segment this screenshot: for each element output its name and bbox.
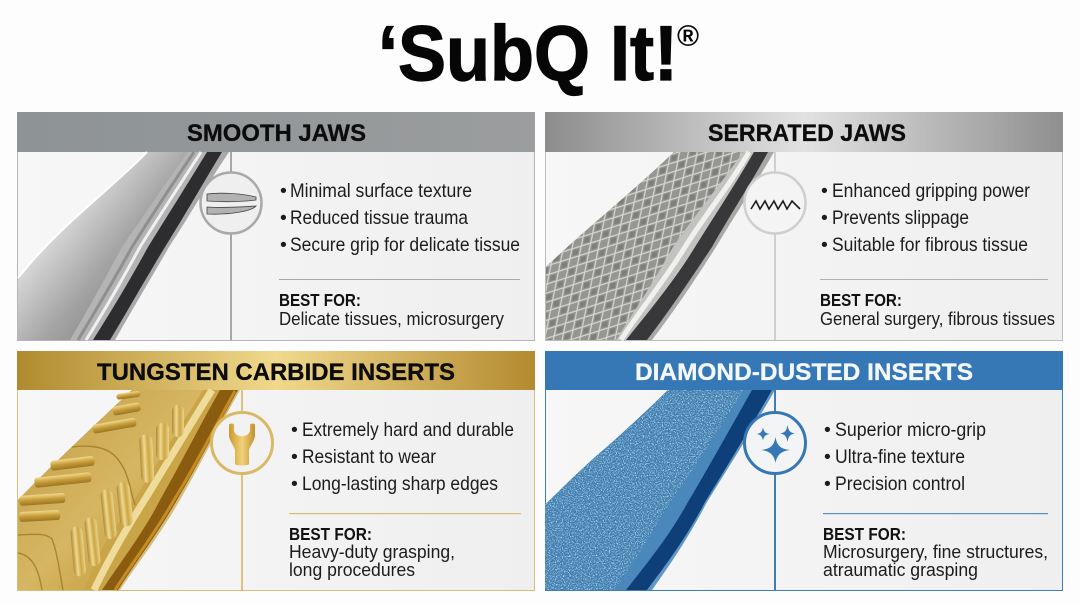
benefits list: Enhanced gripping power xyxy=(832,180,1030,202)
benefits list: • xyxy=(821,234,828,256)
icon: smooth jaws xyxy=(200,172,262,234)
image: blue tweezer jaw xyxy=(545,390,775,590)
best for xyxy=(820,290,1055,329)
divider xyxy=(774,152,776,340)
benefits list: Superior micro-grip xyxy=(835,419,986,441)
image: gold tweezer jaw xyxy=(18,390,240,590)
best for: General surgery, fibrous tissues xyxy=(820,308,1055,329)
benefits list: • xyxy=(280,180,287,202)
benefits list: • xyxy=(280,207,287,229)
benefits list xyxy=(824,419,986,495)
benefits list xyxy=(280,180,520,256)
icon: tungsten insert xyxy=(212,412,272,474)
header: tungsten carbide inserts: TUNGSTEN CARBIDE INSERTS xyxy=(97,359,455,386)
benefits list: • xyxy=(824,473,831,495)
icon: diamond sparkles xyxy=(744,412,806,474)
benefits list xyxy=(821,180,1030,256)
benefits list: Extremely hard and durable xyxy=(302,419,514,441)
header: tungsten carbide inserts xyxy=(17,351,535,390)
panel: serrated jaws xyxy=(545,112,1063,340)
benefits list: Precision control xyxy=(835,473,965,495)
benefits list: Suitable for fibrous tissue xyxy=(832,234,1028,256)
title: ‘SubQ It! xyxy=(378,9,678,97)
best for xyxy=(823,524,1048,580)
best for: BEST FOR: xyxy=(820,290,902,310)
best for: BEST FOR: xyxy=(823,524,906,544)
benefits list xyxy=(291,419,514,495)
header: diamond-dusted inserts xyxy=(545,351,1063,390)
header: smooth jaws: SMOOTH JAWS xyxy=(187,120,366,147)
title: ® xyxy=(677,20,699,53)
best for: BEST FOR: xyxy=(279,290,361,310)
best for: Microsurgery, fine structures, xyxy=(823,541,1048,562)
best for xyxy=(289,524,455,580)
best for: atraumatic grasping xyxy=(823,559,978,580)
divider xyxy=(774,390,776,590)
best for xyxy=(279,290,505,329)
benefits list: • xyxy=(291,446,298,468)
best for: Delicate tissues, microsurgery xyxy=(279,308,505,329)
header: smooth jaws xyxy=(17,112,535,152)
benefits list: • xyxy=(821,207,828,229)
panel: tungsten carbide inserts xyxy=(17,351,535,590)
benefits list: • xyxy=(291,419,298,441)
icon: serrated jaws xyxy=(744,172,806,234)
benefits list: Minimal surface texture xyxy=(290,180,472,202)
benefits list: • xyxy=(824,419,831,441)
benefits list: Ultra-fine texture xyxy=(835,446,965,468)
benefits list: Reduced tissue trauma xyxy=(290,207,468,229)
benefits list: Resistant to wear xyxy=(302,446,436,468)
benefits list: • xyxy=(291,473,298,495)
benefits list: • xyxy=(821,180,828,202)
benefits list: • xyxy=(824,446,831,468)
benefits list: • xyxy=(280,234,287,256)
header: diamond-dusted inserts: DIAMOND-DUSTED INSERTS xyxy=(635,359,973,386)
best for: Heavy-duty grasping, xyxy=(289,541,455,562)
image: serrated tweezer jaw xyxy=(546,152,774,340)
divider xyxy=(230,152,232,340)
header: serrated jaws xyxy=(545,112,1063,152)
best for: BEST FOR: xyxy=(289,524,372,544)
header: serrated jaws: SERRATED JAWS xyxy=(708,120,906,147)
benefits list: Secure grip for delicate tissue xyxy=(290,234,520,256)
benefits list: Long-lasting sharp edges xyxy=(302,473,498,495)
benefits list: Prevents slippage xyxy=(832,207,969,229)
panel: smooth jaws xyxy=(17,112,535,340)
image: smooth tweezer jaw xyxy=(18,152,229,340)
divider xyxy=(241,390,243,590)
best for: long procedures xyxy=(289,559,415,580)
panel: diamond-dusted inserts xyxy=(545,351,1063,590)
